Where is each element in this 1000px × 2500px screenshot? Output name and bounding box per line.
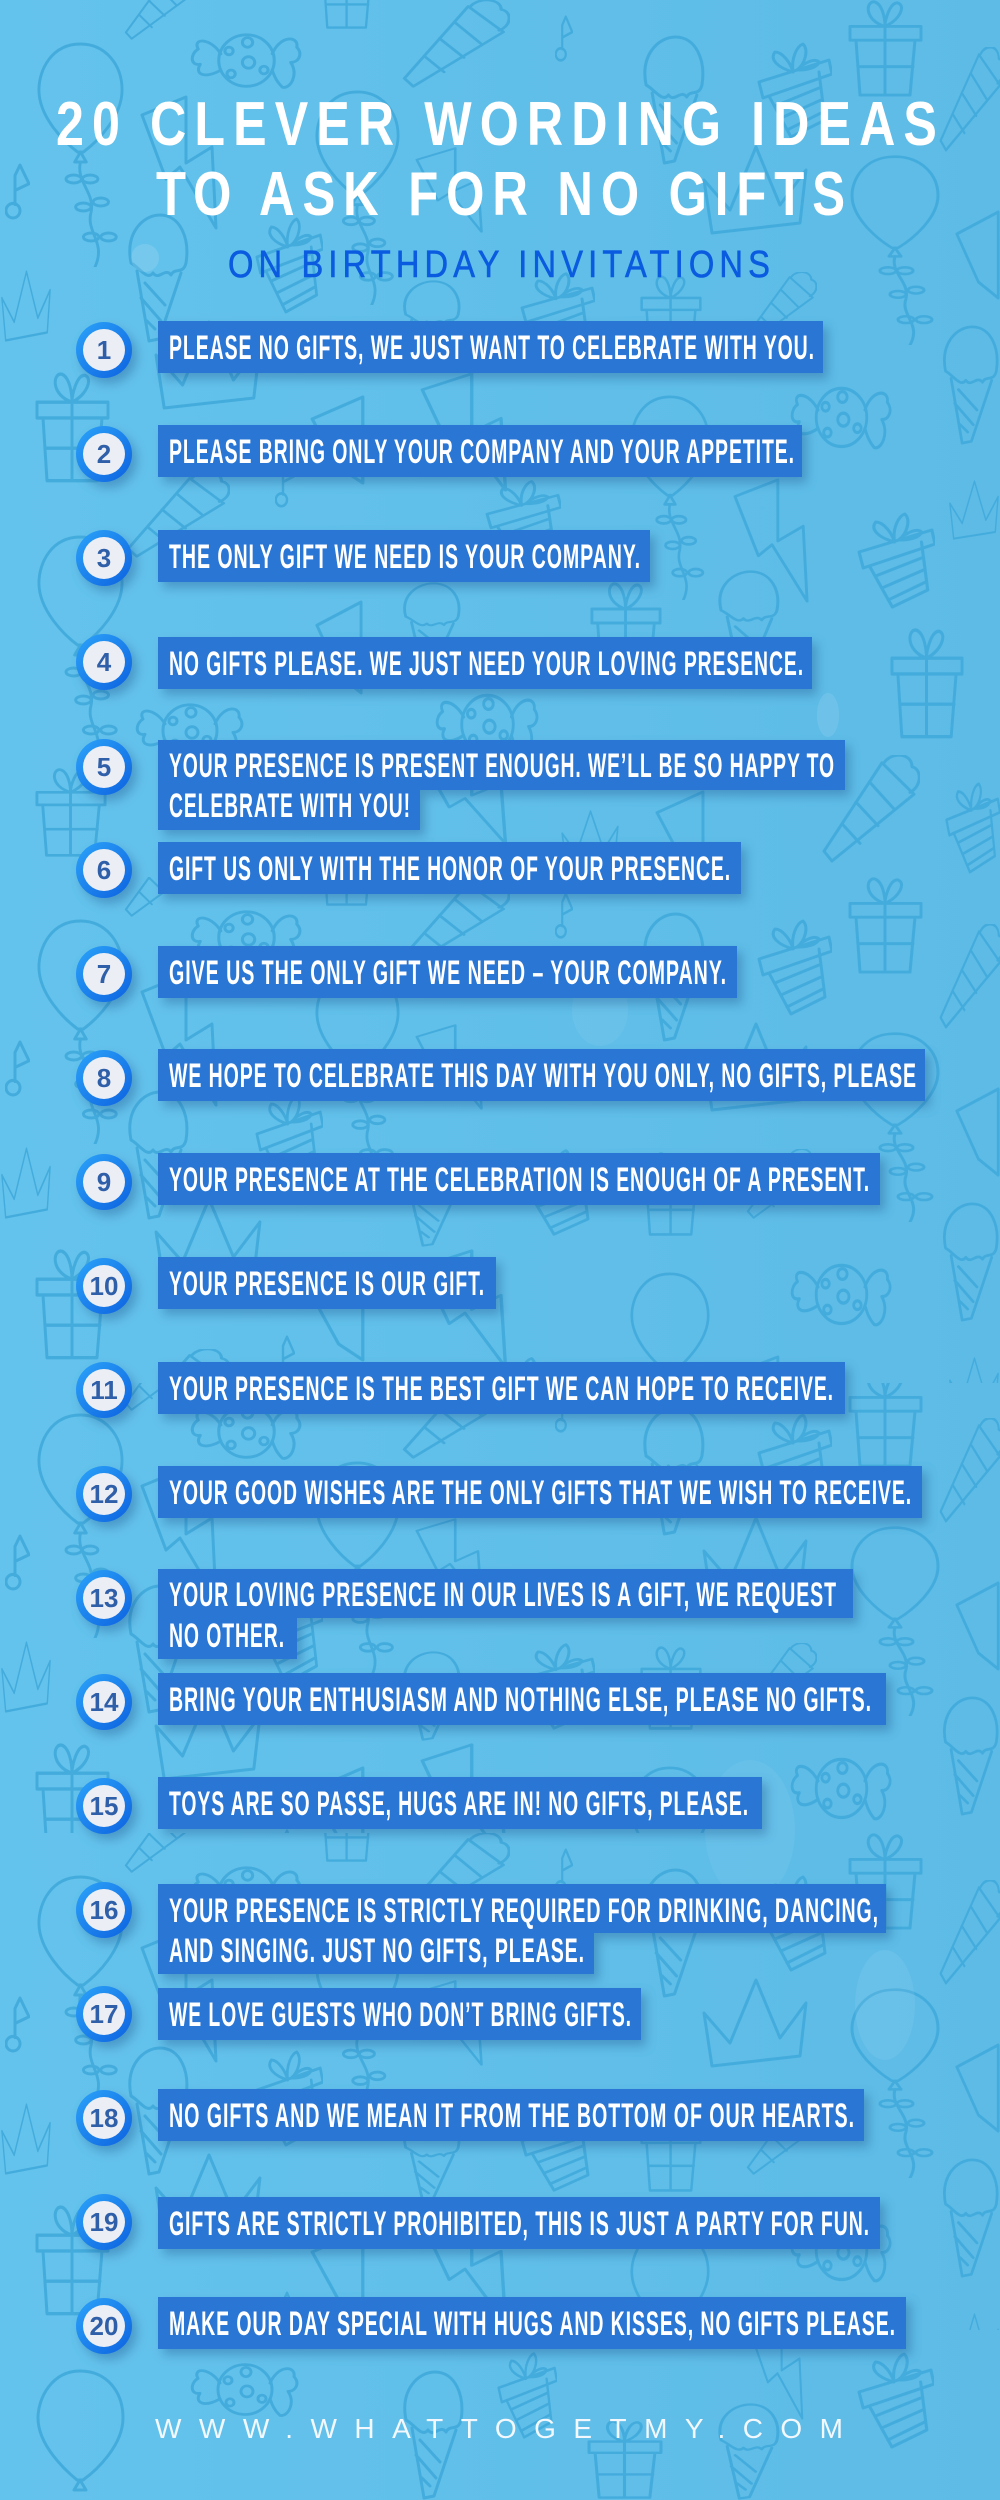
number badge 8: [76, 1050, 132, 1106]
number badge 10: 10: [90, 1271, 118, 1301]
number badge 19: 19: [90, 2207, 118, 2237]
number badge 1: [76, 322, 132, 378]
text bar 7: [158, 946, 737, 998]
text bar 17: WE LOVE GUESTS WHO DON’T BRING GIFTS.: [169, 1996, 632, 2034]
text bar 13: [158, 1569, 853, 1659]
text bar 5: [158, 740, 845, 830]
text bar 1: [158, 321, 823, 373]
text bar 3: [158, 530, 650, 582]
number badge 19: [76, 2194, 132, 2250]
number badge 5: [76, 739, 132, 795]
number badge 14: 14: [90, 1687, 119, 1717]
list item 17: [76, 1986, 641, 2042]
text bar 16: [158, 1884, 886, 1974]
number badge 20: 20: [90, 2311, 118, 2341]
number badge 5: 5: [97, 752, 111, 782]
number badge 15: [76, 1778, 132, 1834]
list item 12: [76, 1466, 922, 1522]
number badge 16: [76, 1882, 132, 1938]
text bar 13: NO OTHER.: [169, 1617, 285, 1655]
text bar 10: [158, 1257, 496, 1309]
list item 11: [76, 1362, 845, 1418]
number badge 12: [76, 1466, 132, 1522]
list item 20: [76, 2297, 906, 2354]
list item 4: [76, 634, 812, 690]
number badge 17: 17: [90, 1999, 118, 2029]
text bar 3: THE ONLY GIFT WE NEED IS YOUR COMPANY.: [169, 538, 641, 576]
text bar 9: [158, 1153, 880, 1205]
text bar 20: [158, 2297, 906, 2349]
number badge 11: 11: [90, 1375, 118, 1405]
text bar 6: [158, 842, 741, 894]
number badge 9: [76, 1154, 132, 1210]
number badge 3: 3: [97, 543, 111, 573]
text bar 14: [158, 1673, 886, 1725]
subtitle: ON BIRTHDAY INVITATIONS: [228, 244, 775, 286]
number badge 6: [76, 842, 132, 898]
text bar 17: [158, 1988, 641, 2040]
list item 3: [76, 530, 650, 586]
text bar 4: [158, 637, 812, 689]
text bar 16: AND SINGING. JUST NO GIFTS, PLEASE.: [169, 1932, 585, 1970]
number badge 4: [76, 634, 132, 690]
list item 8: [76, 1049, 925, 1106]
number badge 1: 1: [97, 335, 111, 365]
number badge 18: 18: [90, 2103, 118, 2133]
number badge 11: [76, 1362, 132, 1418]
number badge 2: 2: [97, 439, 111, 469]
text bar 18: [158, 2089, 864, 2141]
list item 6: [76, 842, 741, 898]
text bar 19: [158, 2197, 880, 2249]
number badge 15: 15: [90, 1791, 118, 1821]
list item 10: [76, 1257, 496, 1314]
list item 2: [76, 425, 802, 482]
text bar 8: [158, 1049, 925, 1101]
list item 19: [76, 2194, 880, 2250]
footer website: WWW.WHATTOGETMY.COM: [155, 2413, 843, 2444]
list item 14: [76, 1673, 886, 1730]
number badge 13: [76, 1570, 132, 1626]
list item 7: [76, 946, 737, 1002]
text bar 12: [158, 1466, 922, 1518]
number badge 12: 12: [90, 1479, 118, 1509]
number badge 8: 8: [97, 1063, 111, 1093]
list item 1: [76, 321, 823, 378]
number badge 10: [76, 1258, 132, 1314]
number badge 14: [76, 1674, 132, 1730]
list item 9: [76, 1153, 880, 1210]
text bar 10: YOUR PRESENCE IS OUR GIFT.: [169, 1265, 485, 1303]
number badge 7: [76, 946, 132, 1002]
number badge 6: 6: [97, 855, 111, 885]
number badge 18: [76, 2090, 132, 2146]
title: [56, 90, 945, 229]
number badge 20: [76, 2298, 132, 2354]
number badge 13: 13: [90, 1583, 118, 1613]
number badge 7: 7: [97, 959, 111, 989]
text bar 5: CELEBRATE WITH YOU!: [169, 787, 411, 825]
list item 13: [76, 1569, 853, 1659]
number badge 4: 4: [97, 647, 112, 677]
number badge 16: 16: [90, 1895, 118, 1925]
number badge 17: [76, 1986, 132, 2042]
list item 5: [76, 739, 845, 830]
number badge 3: [76, 530, 132, 586]
list item 18: [76, 2089, 864, 2146]
text bar 2: [158, 425, 802, 477]
list item 16: [76, 1882, 886, 1974]
text bar 11: [158, 1362, 845, 1414]
text bar 15: [158, 1777, 762, 1829]
number badge 2: [76, 426, 132, 482]
number badge 9: 9: [97, 1167, 111, 1197]
list item 15: [76, 1777, 762, 1834]
